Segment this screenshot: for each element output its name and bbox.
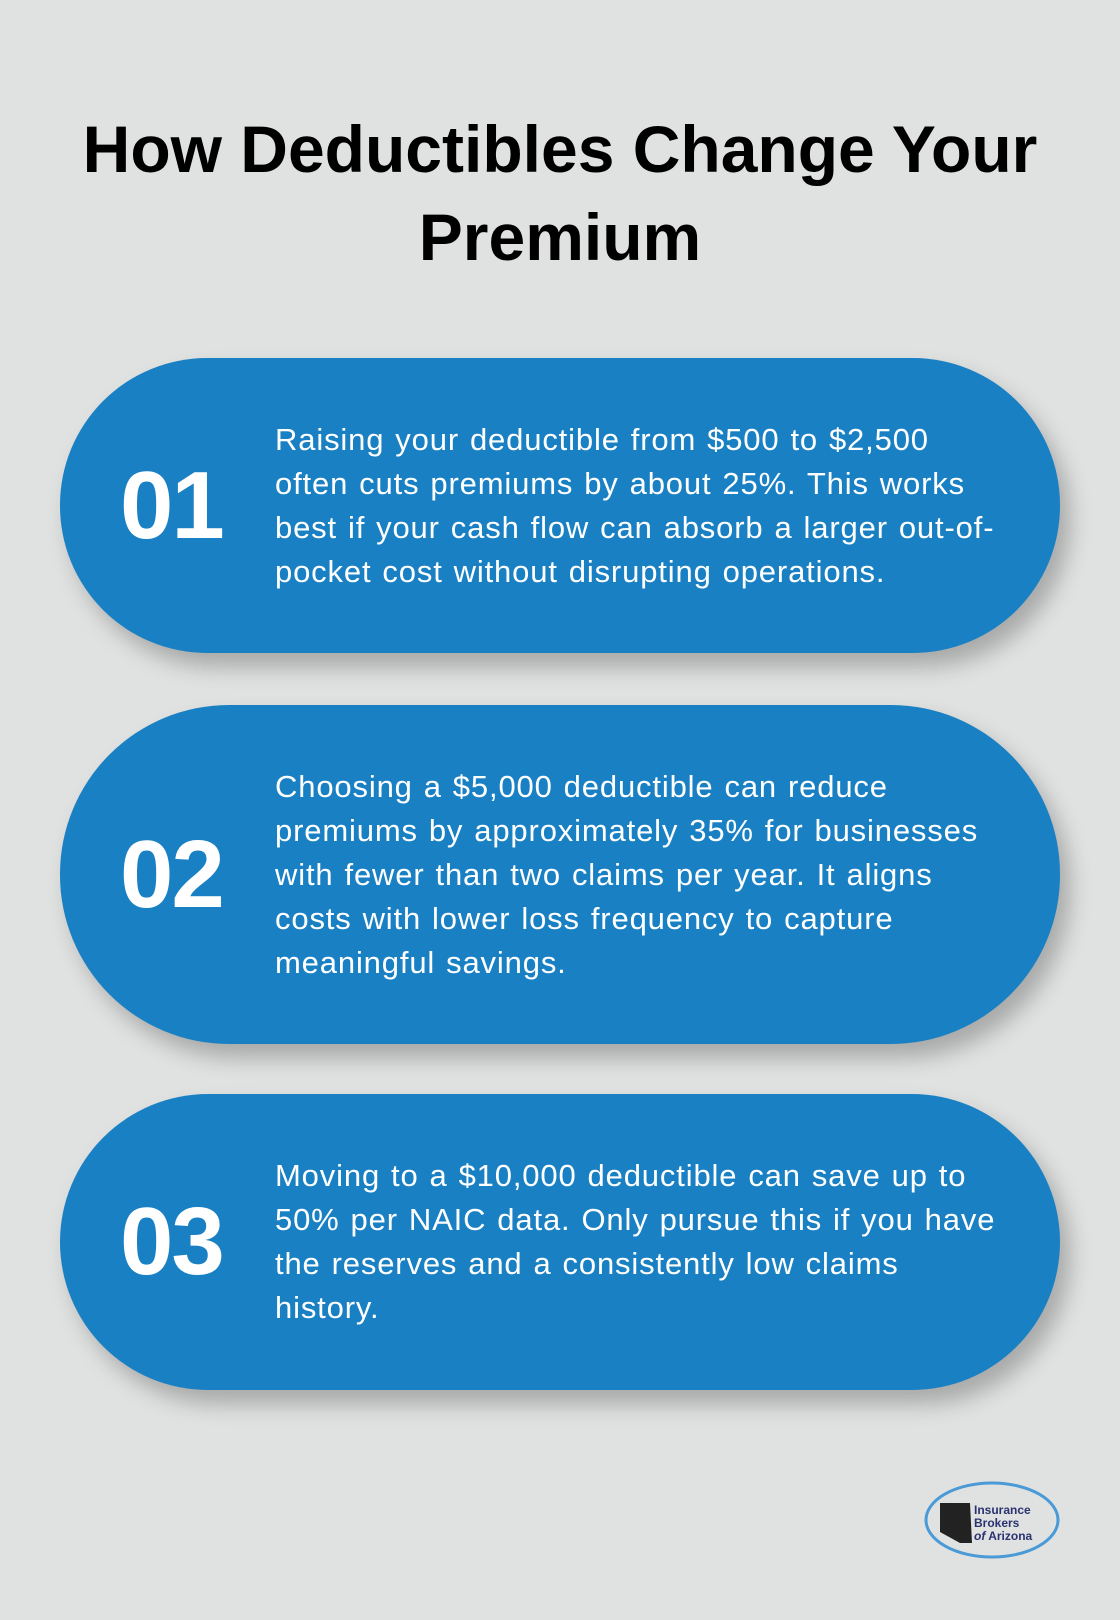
logo bbox=[924, 1482, 1060, 1558]
panel: step 03 bbox=[60, 1094, 1060, 1390]
title: How Deductibles Change Your bbox=[83, 112, 1037, 186]
text 02 bbox=[275, 768, 978, 980]
text 01 bbox=[275, 422, 994, 588]
text 02: with fewer than two claims per year. It aligns bbox=[275, 856, 933, 892]
logo: Insurance bbox=[974, 1503, 1031, 1517]
number 02: 02 bbox=[120, 820, 223, 928]
text 01: pocket cost without disrupting operations. bbox=[275, 554, 885, 588]
logo: Brokers bbox=[974, 1516, 1020, 1530]
text 02: meaningful savings. bbox=[275, 944, 567, 980]
number 01: 01 bbox=[120, 452, 223, 558]
number 03: 03 bbox=[120, 1188, 223, 1295]
text 01: best if your cash flow can absorb a larger out-of- bbox=[275, 510, 994, 544]
text 03: history. bbox=[275, 1290, 379, 1325]
text 03: 50% per NAIC data. Only pursue this if you have bbox=[275, 1202, 995, 1237]
title: Premium bbox=[419, 200, 701, 274]
panel: step 02 bbox=[60, 705, 1060, 1044]
text 01: often cuts premiums by about 25%. This works bbox=[275, 466, 965, 500]
text 02: premiums by approximately 35% for businesses bbox=[275, 812, 978, 848]
text 03 bbox=[275, 1158, 995, 1325]
text 01: Raising your deductible from $500 to $2,500 bbox=[275, 422, 929, 456]
panel: step 01 bbox=[60, 358, 1060, 653]
text 02: costs with lower loss frequency to capture bbox=[275, 900, 893, 936]
text 03: Moving to a $10,000 deductible can save up to bbox=[275, 1158, 966, 1193]
text 02: Choosing a $5,000 deductible can reduce bbox=[275, 768, 888, 804]
title bbox=[83, 112, 1037, 274]
text 03: the reserves and a consistently low claims bbox=[275, 1246, 899, 1281]
logo: of Arizona bbox=[974, 1529, 1033, 1543]
